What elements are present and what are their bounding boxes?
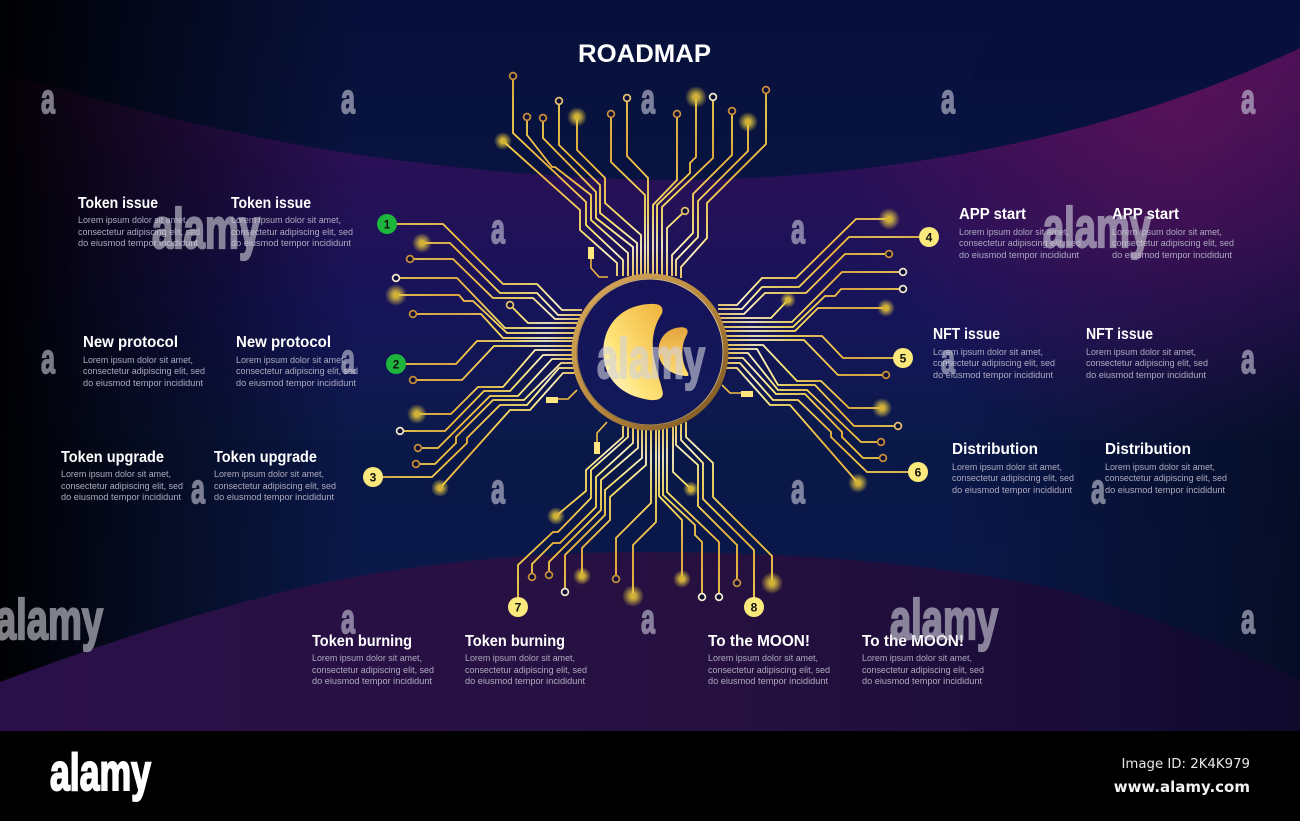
text block: Distribution copy: Distribution xyxy=(1105,441,1191,458)
text block: NFT issue: consectetur adipiscing elit, sed xyxy=(933,358,1055,369)
watermarks: small letters: a xyxy=(641,75,655,122)
text block: Token burning xyxy=(312,633,434,687)
number badges: 4 xyxy=(926,230,933,244)
text block: Token upgrade copy xyxy=(214,449,336,503)
text block: APP start: do eiusmod tempor incididunt xyxy=(959,250,1079,261)
text block: NFT issue copy: NFT issue xyxy=(1086,326,1153,343)
watermarks: small letters xyxy=(41,75,1255,642)
text block: NFT issue xyxy=(933,326,1055,381)
number badges: 6 xyxy=(915,466,922,480)
circuit traces: bottom right xyxy=(659,422,772,607)
text block: Token upgrade copy: Lorem ipsum dolor sit amet, xyxy=(214,469,324,480)
watermarks: small letters: a xyxy=(491,465,505,512)
text block: New protocol copy: do eiusmod tempor incididunt xyxy=(236,378,356,389)
text block: Token burning: Token burning xyxy=(312,633,412,650)
number badges xyxy=(363,214,939,617)
number badges: 8 xyxy=(751,600,758,614)
text block: New protocol: Lorem ipsum dolor sit amet, xyxy=(83,355,193,366)
watermarks: small letters: a xyxy=(941,335,955,382)
watermarks: small letters: a xyxy=(191,465,205,512)
text block: NFT issue: NFT issue xyxy=(933,326,1000,343)
text block: Distribution: do eiusmod tempor incididunt xyxy=(952,485,1072,496)
text block: Token issue copy: Token issue xyxy=(231,195,311,212)
text block: NFT issue copy: do eiusmod tempor incididunt xyxy=(1086,370,1206,381)
text block: To the MOON! copy xyxy=(862,633,984,687)
text block: APP start: APP start xyxy=(959,206,1026,223)
text block: Token burning copy: consectetur adipiscing elit, sed xyxy=(465,665,587,676)
text block: Distribution copy: Lorem ipsum dolor sit amet, xyxy=(1105,462,1215,473)
watermarks: large wordmarks: alamy xyxy=(1043,196,1151,260)
glowing terminals xyxy=(385,86,900,607)
watermarks: large wordmarks: alamy xyxy=(152,197,260,261)
footer website: www.alamy.com xyxy=(1114,778,1250,796)
text block: Distribution: consectetur adipiscing elit, sed xyxy=(952,473,1074,484)
text block: Token upgrade: do eiusmod tempor incididunt xyxy=(61,492,181,503)
central coin xyxy=(574,276,726,428)
text block: NFT issue copy: Lorem ipsum dolor sit amet, xyxy=(1086,347,1196,358)
watermarks: large wordmarks: alamy xyxy=(890,588,998,652)
text block: To the MOON! copy: do eiusmod tempor incididunt xyxy=(862,676,982,687)
watermarks: small letters: a xyxy=(1241,335,1255,382)
number badges: 7 xyxy=(515,600,522,614)
text block: Token burning copy: Token burning xyxy=(465,633,565,650)
title: ROADMAP xyxy=(578,40,711,68)
watermarks: small letters: a xyxy=(1091,465,1105,512)
text block: Token upgrade copy: Token upgrade xyxy=(214,449,317,466)
circuit traces: right upper xyxy=(718,219,929,375)
watermarks: small letters: a xyxy=(791,465,805,512)
watermarks: small letters: a xyxy=(641,595,655,642)
footer logo: alamy xyxy=(50,744,151,802)
footer image id: Image ID: 2K4K979 xyxy=(1122,757,1250,772)
text block: To the MOON! copy: consectetur adipiscing elit, sed xyxy=(862,665,984,676)
text block: Distribution: Lorem ipsum dolor sit amet, xyxy=(952,462,1062,473)
watermarks: small letters: a xyxy=(1241,595,1255,642)
text block: NFT issue: do eiusmod tempor incididunt xyxy=(933,370,1053,381)
text block: NFT issue: Lorem ipsum dolor sit amet, xyxy=(933,347,1043,358)
text block: APP start: Lorem ipsum dolor sit amet, xyxy=(959,227,1069,238)
text block: Token upgrade: Lorem ipsum dolor sit amet, xyxy=(61,469,171,480)
chips xyxy=(546,247,753,454)
text block: Token burning copy: Lorem ipsum dolor sit amet, xyxy=(465,653,575,664)
number badges: 2 xyxy=(393,358,400,372)
watermarks: small letters: a xyxy=(341,595,355,642)
text block: Token burning copy xyxy=(465,633,587,687)
text block: Token issue: do eiusmod tempor incididunt xyxy=(78,238,198,249)
text block: Token upgrade copy: consectetur adipiscing elit, sed xyxy=(214,481,336,492)
number badges: 1 xyxy=(384,218,391,232)
text block: Token burning: Lorem ipsum dolor sit amet, xyxy=(312,653,422,664)
text block: APP start copy: Lorem ipsum dolor sit amet, xyxy=(1112,227,1222,238)
watermarks: small letters: a xyxy=(341,75,355,122)
text block: New protocol copy: consectetur adipiscing elit, sed xyxy=(236,366,358,377)
text block: Token burning: consectetur adipiscing elit, sed xyxy=(312,665,434,676)
watermarks: small letters: a xyxy=(41,335,55,382)
circuit traces: bottom left xyxy=(518,426,656,607)
text block: To the MOON! copy: To the MOON! xyxy=(862,633,964,650)
watermarks: large wordmarks xyxy=(0,196,1151,652)
text block: New protocol: do eiusmod tempor incididunt xyxy=(83,378,203,389)
circuit traces: top left xyxy=(503,76,648,276)
text block: Token upgrade: consectetur adipiscing elit, sed xyxy=(61,481,183,492)
text block: Token issue copy: Lorem ipsum dolor sit amet, xyxy=(231,215,341,226)
text block: To the MOON! xyxy=(708,633,830,687)
text block: Token issue: Lorem ipsum dolor sit amet, xyxy=(78,215,188,226)
number badges: 5 xyxy=(900,352,907,366)
circuit traces: top right xyxy=(653,90,766,278)
text block: Distribution copy: consectetur adipiscing elit, sed xyxy=(1105,473,1227,484)
footer bar xyxy=(0,731,1300,821)
icon: coin logo crescents xyxy=(603,304,688,400)
text block: APP start copy xyxy=(1112,206,1234,261)
text block: Distribution xyxy=(952,441,1074,496)
number badges: 3 xyxy=(370,470,377,484)
text block: New protocol copy: Lorem ipsum dolor sit amet, xyxy=(236,355,346,366)
watermarks: small letters: a xyxy=(791,205,805,252)
text block: Token burning: do eiusmod tempor incididunt xyxy=(312,676,432,687)
text block: NFT issue copy: consectetur adipiscing elit, sed xyxy=(1086,358,1208,369)
text block: Distribution copy xyxy=(1105,441,1227,496)
text block: To the MOON! copy: Lorem ipsum dolor sit amet, xyxy=(862,653,972,664)
watermarks: small letters: a xyxy=(941,75,955,122)
watermarks: small letters: a xyxy=(491,205,505,252)
text block: Token issue copy: consectetur adipiscing elit, sed xyxy=(231,227,353,238)
text block: Token issue: consectetur adipiscing elit, sed xyxy=(78,227,200,238)
text block: Token issue copy: do eiusmod tempor incididunt xyxy=(231,238,351,249)
text block: APP start copy: do eiusmod tempor incididunt xyxy=(1112,250,1232,261)
circuit traces: left lower xyxy=(373,341,580,488)
text block: New protocol copy: New protocol xyxy=(236,334,331,351)
circuit traces: right lower xyxy=(722,345,918,483)
watermarks: large wordmarks: alamy xyxy=(597,327,705,391)
text block: New protocol: New protocol xyxy=(83,334,178,351)
text block: To the MOON!: Lorem ipsum dolor sit amet, xyxy=(708,653,818,664)
watermarks: small letters: a xyxy=(41,75,55,122)
text block: Token upgrade copy: do eiusmod tempor incididunt xyxy=(214,492,334,503)
watermarks: small letters: a xyxy=(1241,75,1255,122)
text block: Token issue xyxy=(78,195,200,249)
text block: NFT issue copy xyxy=(1086,326,1208,381)
text block: New protocol: consectetur adipiscing elit, sed xyxy=(83,366,205,377)
text block: APP start copy: consectetur adipiscing elit, sed xyxy=(1112,238,1234,249)
text block: Token burning copy: do eiusmod tempor incididunt xyxy=(465,676,585,687)
text block: New protocol xyxy=(83,334,205,389)
text block: APP start xyxy=(959,206,1081,261)
text block: Token upgrade: Token upgrade xyxy=(61,449,164,466)
text block: APP start: consectetur adipiscing elit, sed xyxy=(959,238,1081,249)
text block: Distribution: Distribution xyxy=(952,441,1038,458)
text block: Token issue: Token issue xyxy=(78,195,158,212)
text block: To the MOON!: do eiusmod tempor incididunt xyxy=(708,676,828,687)
ring terminals xyxy=(393,73,906,600)
circuit traces: left upper xyxy=(387,224,582,338)
text block: To the MOON!: consectetur adipiscing elit, sed xyxy=(708,665,830,676)
text block: To the MOON!: To the MOON! xyxy=(708,633,810,650)
watermarks: small letters: a xyxy=(341,335,355,382)
text block: Token upgrade xyxy=(61,449,183,503)
text block: Token issue copy xyxy=(231,195,353,249)
text block: New protocol copy xyxy=(236,334,358,389)
text block: APP start copy: APP start xyxy=(1112,206,1179,223)
text block: Distribution copy: do eiusmod tempor incididunt xyxy=(1105,485,1225,496)
